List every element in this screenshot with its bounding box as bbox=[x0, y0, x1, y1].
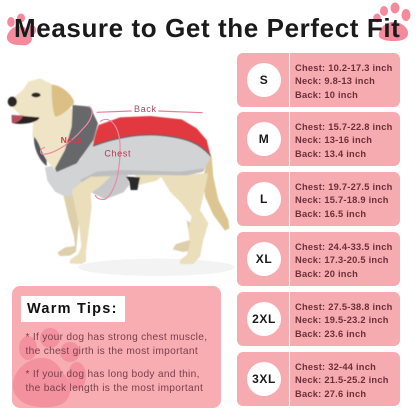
tip 1 bbox=[26, 332, 207, 356]
measurements 3XL: Back: 27.6 inch bbox=[295, 388, 366, 398]
measurements XL: Chest: 24.4-33.5 inch bbox=[295, 242, 393, 252]
fleece collar bbox=[55, 105, 98, 172]
tip 1: the chest girth is the most important bbox=[26, 346, 198, 356]
measurements L bbox=[295, 182, 393, 218]
size badge 3XL bbox=[247, 362, 281, 396]
heading box: Warm Tips: bbox=[27, 301, 118, 317]
dog neck and chest bbox=[32, 100, 75, 171]
size badge 2XL: 2XL bbox=[252, 312, 276, 326]
measurements 3XL: Chest: 32-44 inch bbox=[295, 362, 376, 372]
coat grey body bbox=[45, 125, 210, 197]
measurements S: Neck: 9.8-13 inch bbox=[295, 76, 375, 86]
card: size M bbox=[237, 112, 400, 166]
measurements 2XL: Back: 23.6 inch bbox=[295, 328, 366, 338]
belly bbox=[135, 175, 163, 185]
card: size XL bbox=[237, 232, 400, 286]
size badge S: S bbox=[260, 73, 268, 87]
measurements S: Back: 10 inch bbox=[295, 90, 358, 100]
measurements M: Chest: 15.7-22.8 inch bbox=[295, 122, 393, 132]
measurements L: Back: 16.5 inch bbox=[295, 208, 366, 218]
size badge M: M bbox=[259, 132, 269, 146]
size badge L: L bbox=[260, 192, 268, 206]
measure: neck loop bbox=[41, 107, 92, 154]
ground shadow bbox=[78, 259, 235, 276]
mouth bbox=[12, 115, 39, 124]
measurements XL: Neck: 17.3-20.5 inch bbox=[295, 255, 389, 265]
tip 2: * If your dog has long body and thin, bbox=[26, 369, 200, 380]
label: back: Back bbox=[134, 104, 157, 114]
panel: warm tips bbox=[12, 286, 221, 408]
title: Measure to Get the Perfect Fit bbox=[14, 13, 400, 43]
tip 2: the back length is the most important bbox=[26, 382, 203, 394]
far front leg bbox=[57, 193, 80, 256]
tip 2 bbox=[26, 369, 203, 394]
measurements XL bbox=[295, 242, 393, 278]
dog tail bbox=[203, 140, 229, 231]
measurements M: Back: 13.4 inch bbox=[295, 148, 366, 158]
measurements 2XL: Chest: 27.5-38.8 inch bbox=[295, 302, 393, 312]
measurements 3XL bbox=[295, 362, 389, 398]
near hind leg bbox=[160, 173, 208, 264]
far hind leg bbox=[173, 220, 198, 252]
measure: back line bbox=[97, 111, 203, 113]
card: size 3XL bbox=[237, 352, 400, 406]
measurements S: Chest: 10.2-17.3 inch bbox=[295, 62, 393, 72]
icon: paw top right bbox=[373, 2, 410, 41]
card: size 2XL bbox=[237, 292, 400, 346]
nose and eye bbox=[8, 97, 17, 107]
size badge L bbox=[247, 182, 281, 216]
ear bbox=[52, 85, 74, 117]
buckle bbox=[126, 177, 140, 190]
size badge XL: XL bbox=[256, 252, 272, 266]
measurements XL: Back: 20 inch bbox=[295, 268, 358, 278]
tip 1: * If your dog has strong chest muscle, bbox=[26, 332, 207, 343]
card: size L bbox=[237, 172, 400, 226]
measurements L: Chest: 19.7-27.5 inch bbox=[295, 182, 393, 192]
measure: chest loop bbox=[95, 119, 120, 199]
near front leg bbox=[69, 177, 111, 264]
measurements 2XL bbox=[295, 302, 393, 338]
label: neck: Neck bbox=[61, 135, 83, 145]
illustration: dog wearing coat bbox=[6, 78, 235, 276]
heading box bbox=[20, 296, 125, 322]
card: size S bbox=[237, 53, 400, 107]
measurements L: Neck: 15.7-18.9 inch bbox=[295, 195, 389, 205]
dog head bbox=[8, 78, 57, 123]
measurements 2XL: Neck: 19.5-23.2 inch bbox=[295, 315, 389, 325]
belly strap bbox=[90, 175, 129, 199]
icon: paw top left bbox=[6, 14, 36, 46]
size badge S bbox=[247, 63, 281, 97]
icon: paw watermark bbox=[12, 328, 86, 408]
size badge M bbox=[247, 122, 281, 156]
measurements S bbox=[295, 62, 393, 100]
coat red top bbox=[93, 116, 211, 156]
measurements M: Neck: 13-16 inch bbox=[295, 135, 372, 145]
label: chest: Chest bbox=[104, 149, 131, 159]
size badge XL bbox=[247, 242, 281, 276]
measurements M bbox=[295, 122, 393, 158]
size badge 3XL: 3XL bbox=[252, 372, 276, 386]
measurements 3XL: Neck: 21.5-25.2 inch bbox=[295, 375, 389, 385]
size badge 2XL bbox=[247, 302, 281, 336]
